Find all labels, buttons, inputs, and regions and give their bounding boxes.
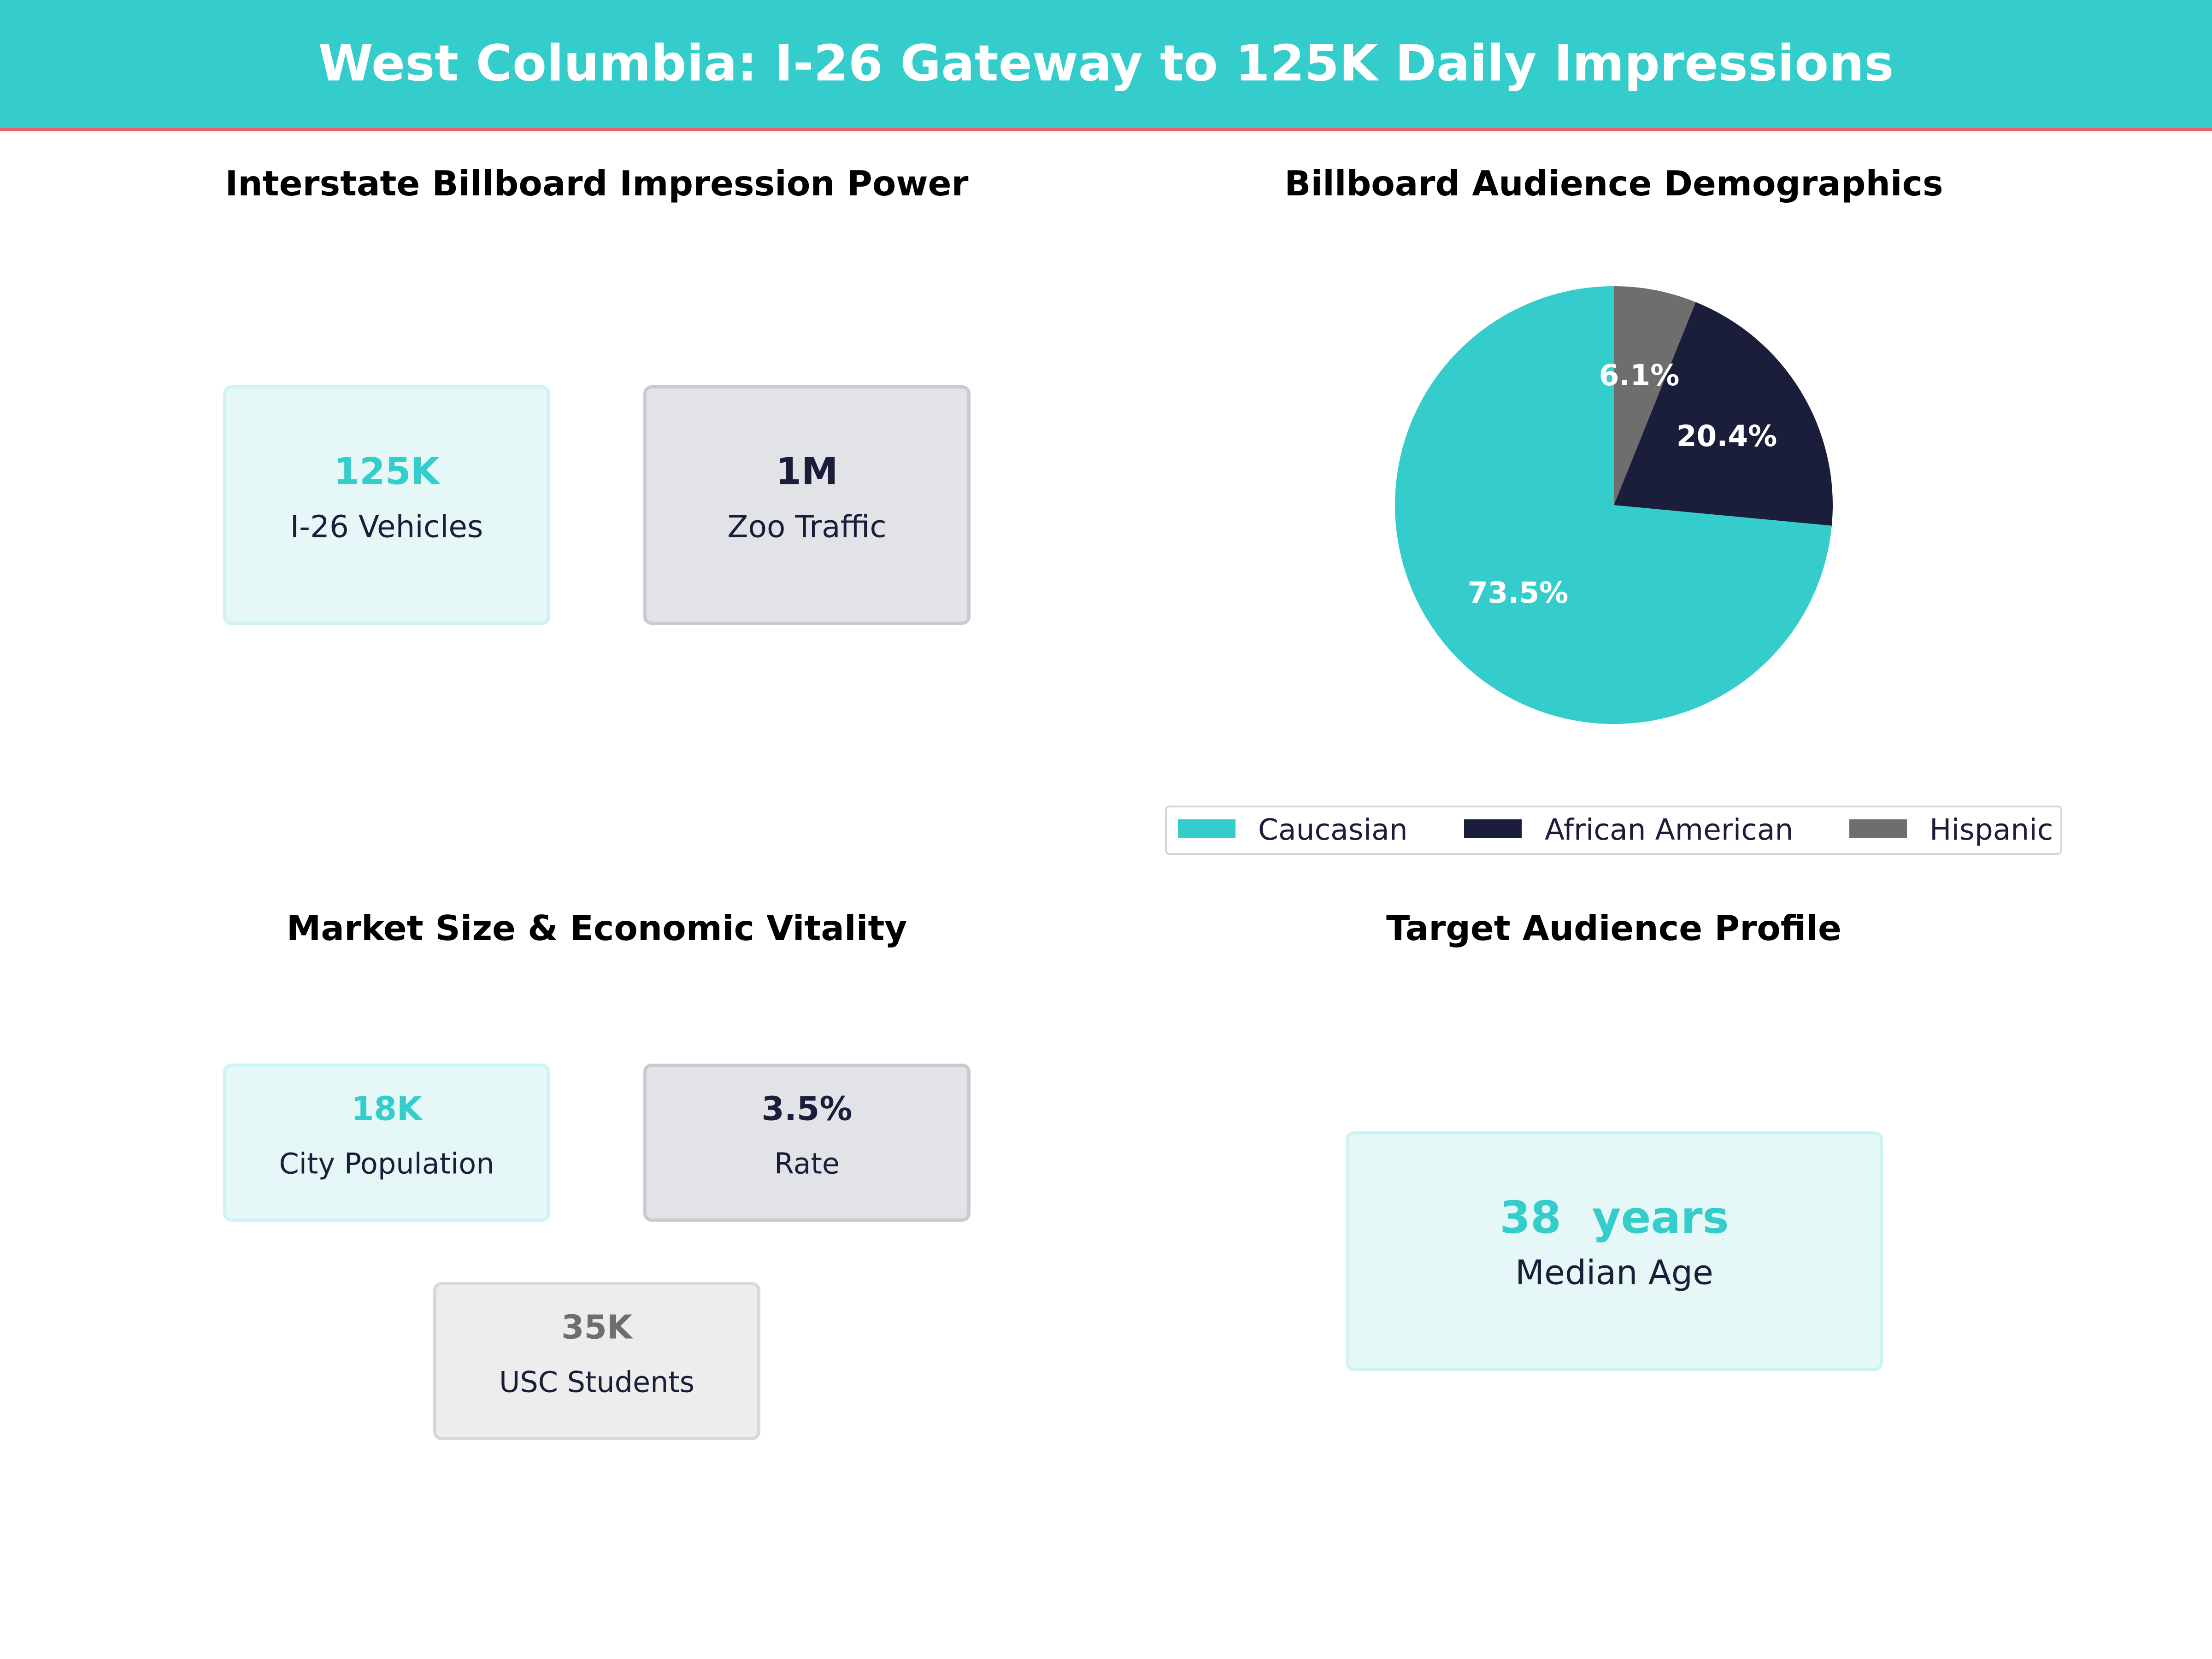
heading: Market Size & Economic Vitality	[287, 908, 907, 948]
heading: Target Audience Profile	[1386, 908, 1841, 948]
card: USC students	[433, 1282, 760, 1440]
card: USC students: 35K	[561, 1308, 632, 1347]
card: city population	[223, 1064, 550, 1222]
card: city population: 18K	[351, 1089, 422, 1128]
card: zoo traffic	[643, 385, 971, 625]
heading: Interstate Billboard Impression Power	[225, 163, 969, 204]
pie chart: 73.5%	[1468, 576, 1568, 610]
card: rate: Rate	[774, 1147, 840, 1181]
card: zoo traffic: 1M	[776, 450, 838, 493]
legend: African American	[1545, 813, 1793, 847]
card: city population: City Population	[279, 1147, 494, 1181]
card: median age: 38 years	[1500, 1192, 1729, 1243]
panel: impression power	[0, 138, 1106, 783]
card: I-26 vehicles: 125K	[334, 450, 439, 493]
card: median age: Median Age	[1515, 1253, 1713, 1292]
pie chart: 6.1%	[1599, 359, 1679, 392]
panel: market size	[0, 899, 1106, 1498]
title: West Columbia: I-26 Gateway to 125K Daily Impressions	[318, 35, 1894, 92]
card: median age	[1346, 1131, 1883, 1371]
card: I-26 vehicles	[223, 385, 550, 625]
card: zoo traffic: Zoo Traffic	[727, 509, 887, 545]
card: rate	[643, 1064, 971, 1222]
heading: Billboard Audience Demographics	[1284, 163, 1943, 204]
pie chart: 20.4%	[1677, 419, 1777, 453]
pie chart	[0, 0, 2212, 876]
card: USC students: USC Students	[499, 1365, 694, 1399]
header banner	[0, 0, 2212, 131]
legend	[1165, 806, 2062, 855]
legend: Hispanic	[1930, 813, 2053, 847]
card: rate: 3.5%	[762, 1089, 852, 1128]
panel: target audience	[1106, 899, 2212, 1498]
card: I-26 vehicles: I-26 Vehicles	[290, 509, 483, 545]
legend: Caucasian	[1258, 813, 1408, 847]
